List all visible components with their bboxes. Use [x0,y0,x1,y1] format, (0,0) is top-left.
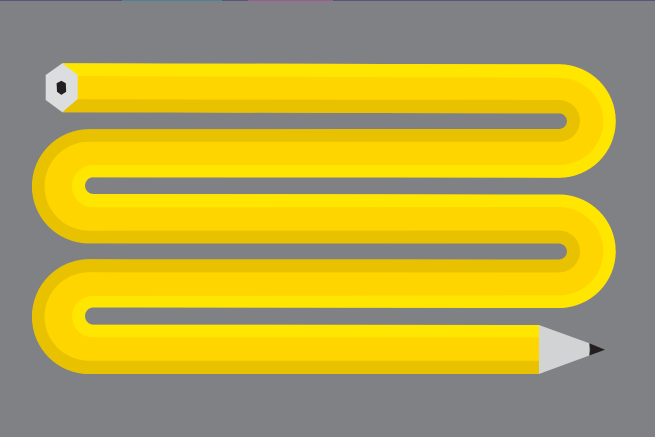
pencil body: middle yellow facet [32,63,616,374]
pencil body: dark yellow facet [32,99,580,374]
pencil end: grey hexagon [46,63,78,112]
pencil tip: graphite point [589,343,605,356]
pencil end: graphite core [57,81,66,95]
top edge strip [0,0,655,1]
pencil body: bright yellow facet [62,63,616,337]
pencil [32,63,616,374]
pencil tip: sharpened wood cone [539,325,589,374]
